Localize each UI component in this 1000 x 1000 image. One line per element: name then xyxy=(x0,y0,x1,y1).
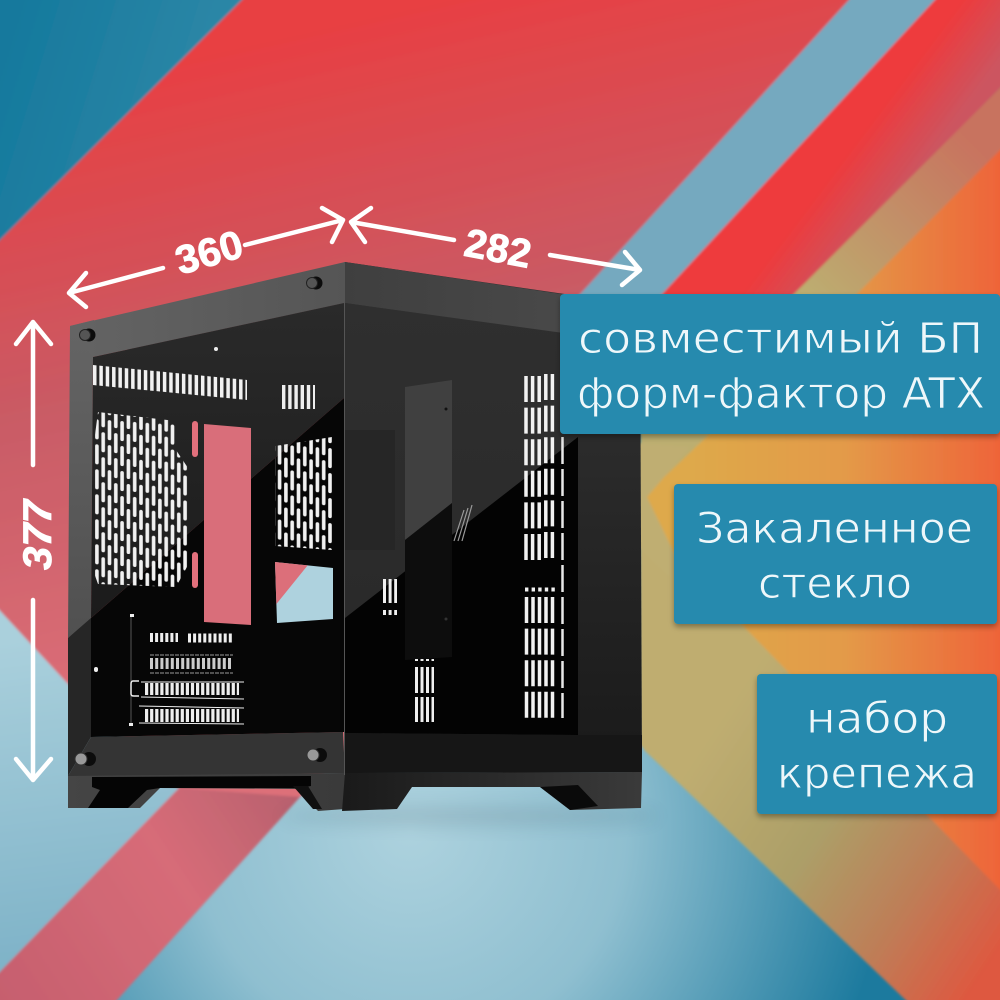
mesh left xyxy=(93,412,188,587)
callout: fastener kit: крепежа xyxy=(777,749,977,799)
pci slots xyxy=(131,615,244,725)
dimension arrow: height 377 xyxy=(16,322,51,780)
feet and base xyxy=(68,772,642,811)
dimension label 377: 377 xyxy=(16,498,60,570)
callout: compatible PSU xyxy=(560,294,1000,434)
motherboard window xyxy=(275,562,333,623)
right mesh columns xyxy=(526,374,552,720)
shadow under the case xyxy=(280,807,660,825)
dimension label 282: 282 xyxy=(461,221,535,277)
callout: tempered glass xyxy=(674,484,997,624)
callout: compatible PSU: форм-фактор ATX xyxy=(577,369,985,419)
vertical corner edge xyxy=(344,262,346,775)
right mesh dots xyxy=(525,588,555,592)
callout: tempered glass: стекло xyxy=(758,559,912,609)
pc case xyxy=(68,262,642,811)
small white marks xyxy=(94,347,218,726)
callout: tempered glass: Закаленное xyxy=(696,504,973,554)
dimension arrow: depth 282 xyxy=(351,208,640,285)
small center meshes xyxy=(383,591,434,710)
psu cutout xyxy=(204,424,251,625)
mesh small xyxy=(282,385,315,409)
callout: fastener kit: набор xyxy=(806,694,948,744)
dimension label 360: 360 xyxy=(171,222,248,283)
right glass panel xyxy=(345,262,642,773)
callout: compatible PSU: совместимый БП xyxy=(578,314,983,364)
mesh right xyxy=(275,437,332,550)
dimension arrow: width 360 xyxy=(69,208,343,307)
callout: fastener kit xyxy=(757,674,997,814)
center plate xyxy=(405,380,452,540)
logo stripes xyxy=(454,505,472,541)
mesh top row xyxy=(93,375,247,390)
slots beside psu xyxy=(192,421,198,588)
left glass panel xyxy=(68,262,345,776)
screws xyxy=(75,276,327,766)
narrow slot column xyxy=(561,437,564,718)
inner dark recess xyxy=(345,430,395,550)
